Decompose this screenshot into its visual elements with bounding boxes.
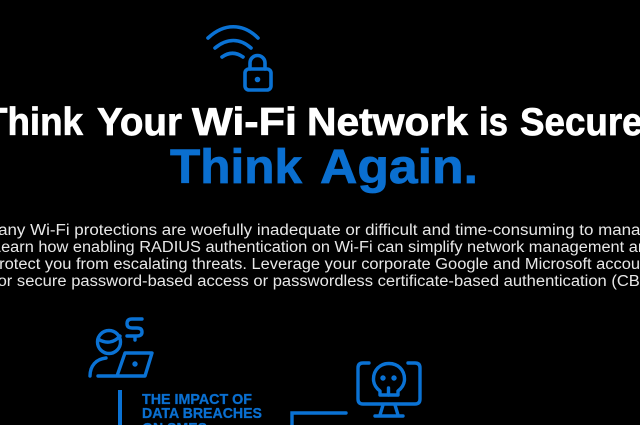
section heading: the impact of data breaches: THE IMPACT OF bbox=[142, 392, 252, 408]
icon: wifi with padlock bbox=[208, 27, 271, 90]
title: is bbox=[479, 101, 508, 144]
icon: monitor with skull bbox=[358, 363, 420, 416]
intro paragraph bbox=[0, 222, 640, 290]
title: Wi-Fi bbox=[192, 101, 297, 144]
intro paragraph: for secure password-based access or passwordless certificate-based authentication (CBA). bbox=[0, 273, 640, 290]
section heading: the impact of data breaches bbox=[142, 392, 262, 425]
subtitle bbox=[170, 141, 478, 194]
timeline line from first icon bbox=[118, 390, 122, 425]
title: Your bbox=[97, 101, 182, 144]
intro paragraph: protect you from escalating threats. Leverage your corporate Google and Microsoft accounts bbox=[0, 256, 640, 273]
intro paragraph: Learn how enabling RADIUS authentication on Wi-Fi can simplify network management and bbox=[0, 239, 640, 256]
subtitle: Think bbox=[170, 141, 302, 194]
title bbox=[0, 101, 640, 144]
subtitle: Again. bbox=[320, 141, 478, 194]
connector line to skull icon bbox=[292, 413, 346, 425]
title: Network bbox=[307, 101, 468, 144]
section heading: the impact of data breaches: DATA BREACHES bbox=[142, 406, 262, 422]
icon: person with laptop and dollar sign bbox=[90, 319, 152, 376]
intro paragraph: Many Wi-Fi protections are woefully inadequate or difficult and time-consuming to manage. bbox=[0, 222, 640, 239]
